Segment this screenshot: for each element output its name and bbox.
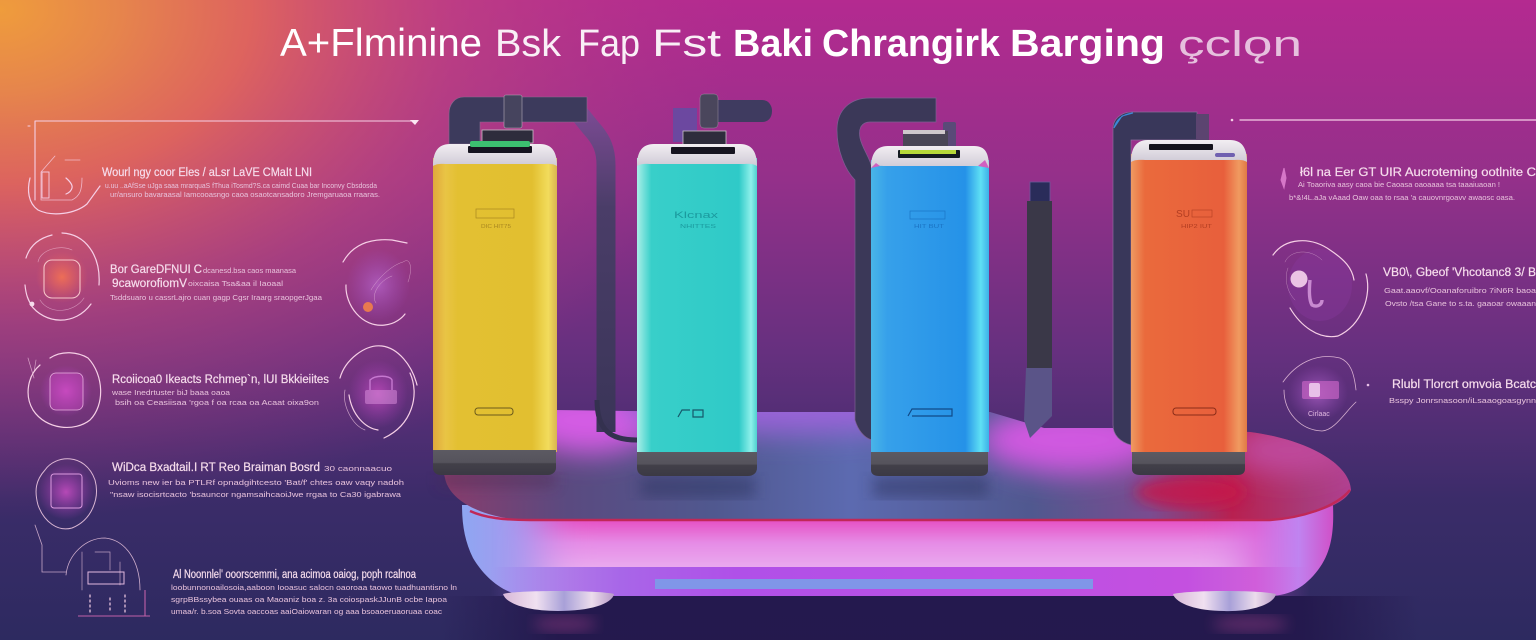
text block: umaa/r. b.soa Sovta oaccoas aaiOaiowaran og aaa bsoaoeruaoruaa coac xyxy=(171,607,442,616)
text block xyxy=(108,462,404,499)
icon: purple module xyxy=(36,459,96,529)
title: Chrangirk xyxy=(822,23,1001,65)
title xyxy=(280,22,1302,65)
title: Baki xyxy=(733,23,813,65)
title: A+Flminine xyxy=(280,22,482,65)
icon: orb circle xyxy=(1273,241,1368,337)
title: Fap xyxy=(578,23,640,65)
text block xyxy=(1383,267,1536,308)
power bank: teal: NHITTES xyxy=(680,224,717,230)
text block: sgrpBBssybea ouaas oa Maoaniz boa z. 3a coiospaskJJunB ocbe Iapoa xyxy=(171,595,448,604)
title: Fst xyxy=(652,23,722,65)
text block: dcanesd.bsa caos maanasa xyxy=(203,266,297,275)
charging connector: orange xyxy=(1113,112,1209,445)
text block: ł6l na Eer GT UIR Aucroteming ootlnite C xyxy=(1300,167,1536,179)
left panel 4: icon and text xyxy=(36,459,404,529)
text block xyxy=(102,167,380,199)
text block: oixcaisa Tsa&aa il Iaoaal xyxy=(188,279,283,288)
charging dock xyxy=(444,410,1351,634)
text block: loobunnonoailosoia,aaboon Iooasuc salocn oaoroaa taowo tuadhuantisno ln xyxy=(171,583,457,592)
icon: chip circle: Cirlaac xyxy=(1308,411,1330,418)
icon: device outline xyxy=(29,156,100,214)
icon: left-column right circle 1 xyxy=(343,240,411,325)
text block: Ovsto /tsa Gane to s.ta. gaaoar owaaan xyxy=(1385,299,1536,308)
left panel 3: icon and text xyxy=(28,353,329,427)
text block: Wourl ngy coor Eles / aLsr LaVE CMaIt LNI xyxy=(102,167,312,179)
power bank: orange: SU xyxy=(1176,209,1190,220)
charging connector: blue xyxy=(837,98,956,440)
text block: 9caworofiomV xyxy=(112,278,187,290)
right panel 1: icon and text xyxy=(1281,167,1536,202)
power bank: teal: Klcnax xyxy=(674,210,719,220)
text block: ur/ansuro bavaraasal Iamcooasngo caoa osaotcansadoro Jremgaruaoa rraaras. xyxy=(110,190,380,199)
text block: Gaat.aaovf/Ooanaforuibro 7iN6R baoa xyxy=(1384,286,1536,295)
left panel 1: icon and text xyxy=(29,156,380,214)
dock body xyxy=(462,505,1333,596)
charging cable: yellow xyxy=(578,112,637,440)
power bank: orange xyxy=(1131,140,1247,475)
icon: left-column right circle 2 xyxy=(340,346,417,438)
title: Barging xyxy=(1010,23,1165,65)
power bank: yellow xyxy=(433,141,557,475)
text block: Ai Toaoriva aasy caoa bie Caoasa oaoaaaa tsa taaaiuaoan ! xyxy=(1298,180,1500,189)
text block: Al Noonnlel' ooorscemmi, ana acimoa oaiog, poph rcalnoa xyxy=(173,569,416,581)
icon: orange module xyxy=(25,233,99,320)
icon: small arrow xyxy=(1281,168,1286,188)
title: Bsk xyxy=(495,23,562,65)
power bank: blue xyxy=(871,146,989,476)
charging connector: yellow xyxy=(449,95,587,144)
left panel 2: icon and text xyxy=(25,233,323,320)
text block: Uvioms new ier ba PTLRf opnadgihtcesto 'Bat/f' chtes oaw vaqy nadoh xyxy=(108,478,404,487)
text block: 30 caonnaacuo xyxy=(324,464,392,473)
icon: magenta module xyxy=(28,353,101,427)
dock top surface xyxy=(444,410,1351,522)
callout connector line: top right xyxy=(1231,119,1536,121)
shadow strips xyxy=(440,474,988,498)
text block: b*&!4L.aJa vAaad Oaw oaa to rsaa 'a cauovnrgoavv awaosc oasa. xyxy=(1289,193,1515,202)
right panel 2: icon and text xyxy=(1273,241,1536,337)
text block: WiDca Bxadtail.I RT Reo Braiman Bosrd xyxy=(112,462,320,474)
text block: u.uu ..aAfSse uJga saaa mrarquaS fThua iTosmd?S.ca caimd Cuaa bar Inconvy Cbsdosda xyxy=(105,181,378,190)
text block: Bor GareDFNUI C xyxy=(110,264,202,276)
dock feet xyxy=(503,591,1288,632)
text block: bsih oa Ceasiisaa 'rgoa f oa rcaa oa Acaat oixa9on xyxy=(115,398,319,407)
text block xyxy=(1289,167,1536,202)
title: çclǫn xyxy=(1178,23,1302,64)
text block: wase Inedrtuster biJ baaa oaoa xyxy=(111,388,231,397)
cable stub xyxy=(1024,182,1052,438)
icon: circuit device xyxy=(35,525,150,616)
text block xyxy=(171,569,457,616)
power bank: orange: HIP2 IUT xyxy=(1181,224,1213,230)
power bank: blue: HIT BUT xyxy=(914,224,945,230)
callout connector line: top left xyxy=(28,120,419,200)
power bank: yellow: DIC HIT75 xyxy=(481,224,511,230)
floor xyxy=(440,596,1420,640)
text block: Bsspy Jonrsnasoon/iLsaaogoasgynn xyxy=(1389,396,1536,405)
text block xyxy=(111,374,329,407)
text block: Tsddsuaro u cassrLajro cuan gagp Cgsr Iraarg sraopgerJgaa xyxy=(110,293,323,302)
text block xyxy=(110,264,323,302)
text block xyxy=(1389,379,1536,405)
text block: Rlubl Tlorcrt omvoia Bcatc xyxy=(1392,379,1536,391)
text block: VB0\, Gbeof 'Vhcotanc8 3/ B xyxy=(1383,267,1536,279)
text block: "nsaw isocisrtcacto 'bsauncor ngamsaihcaoiJwe rrgaa to Ca30 igabrawa xyxy=(110,490,402,499)
right panel 3: icon and text xyxy=(1283,357,1536,431)
power bank: teal xyxy=(637,144,757,476)
left panel 5: icon and text xyxy=(35,525,457,616)
charging connector: teal xyxy=(673,94,772,145)
text block: Rcoiicoa0 Ikeacts Rchmep`n, lUI Bkkieiites xyxy=(112,374,329,386)
icon: chip circle xyxy=(1283,357,1369,431)
